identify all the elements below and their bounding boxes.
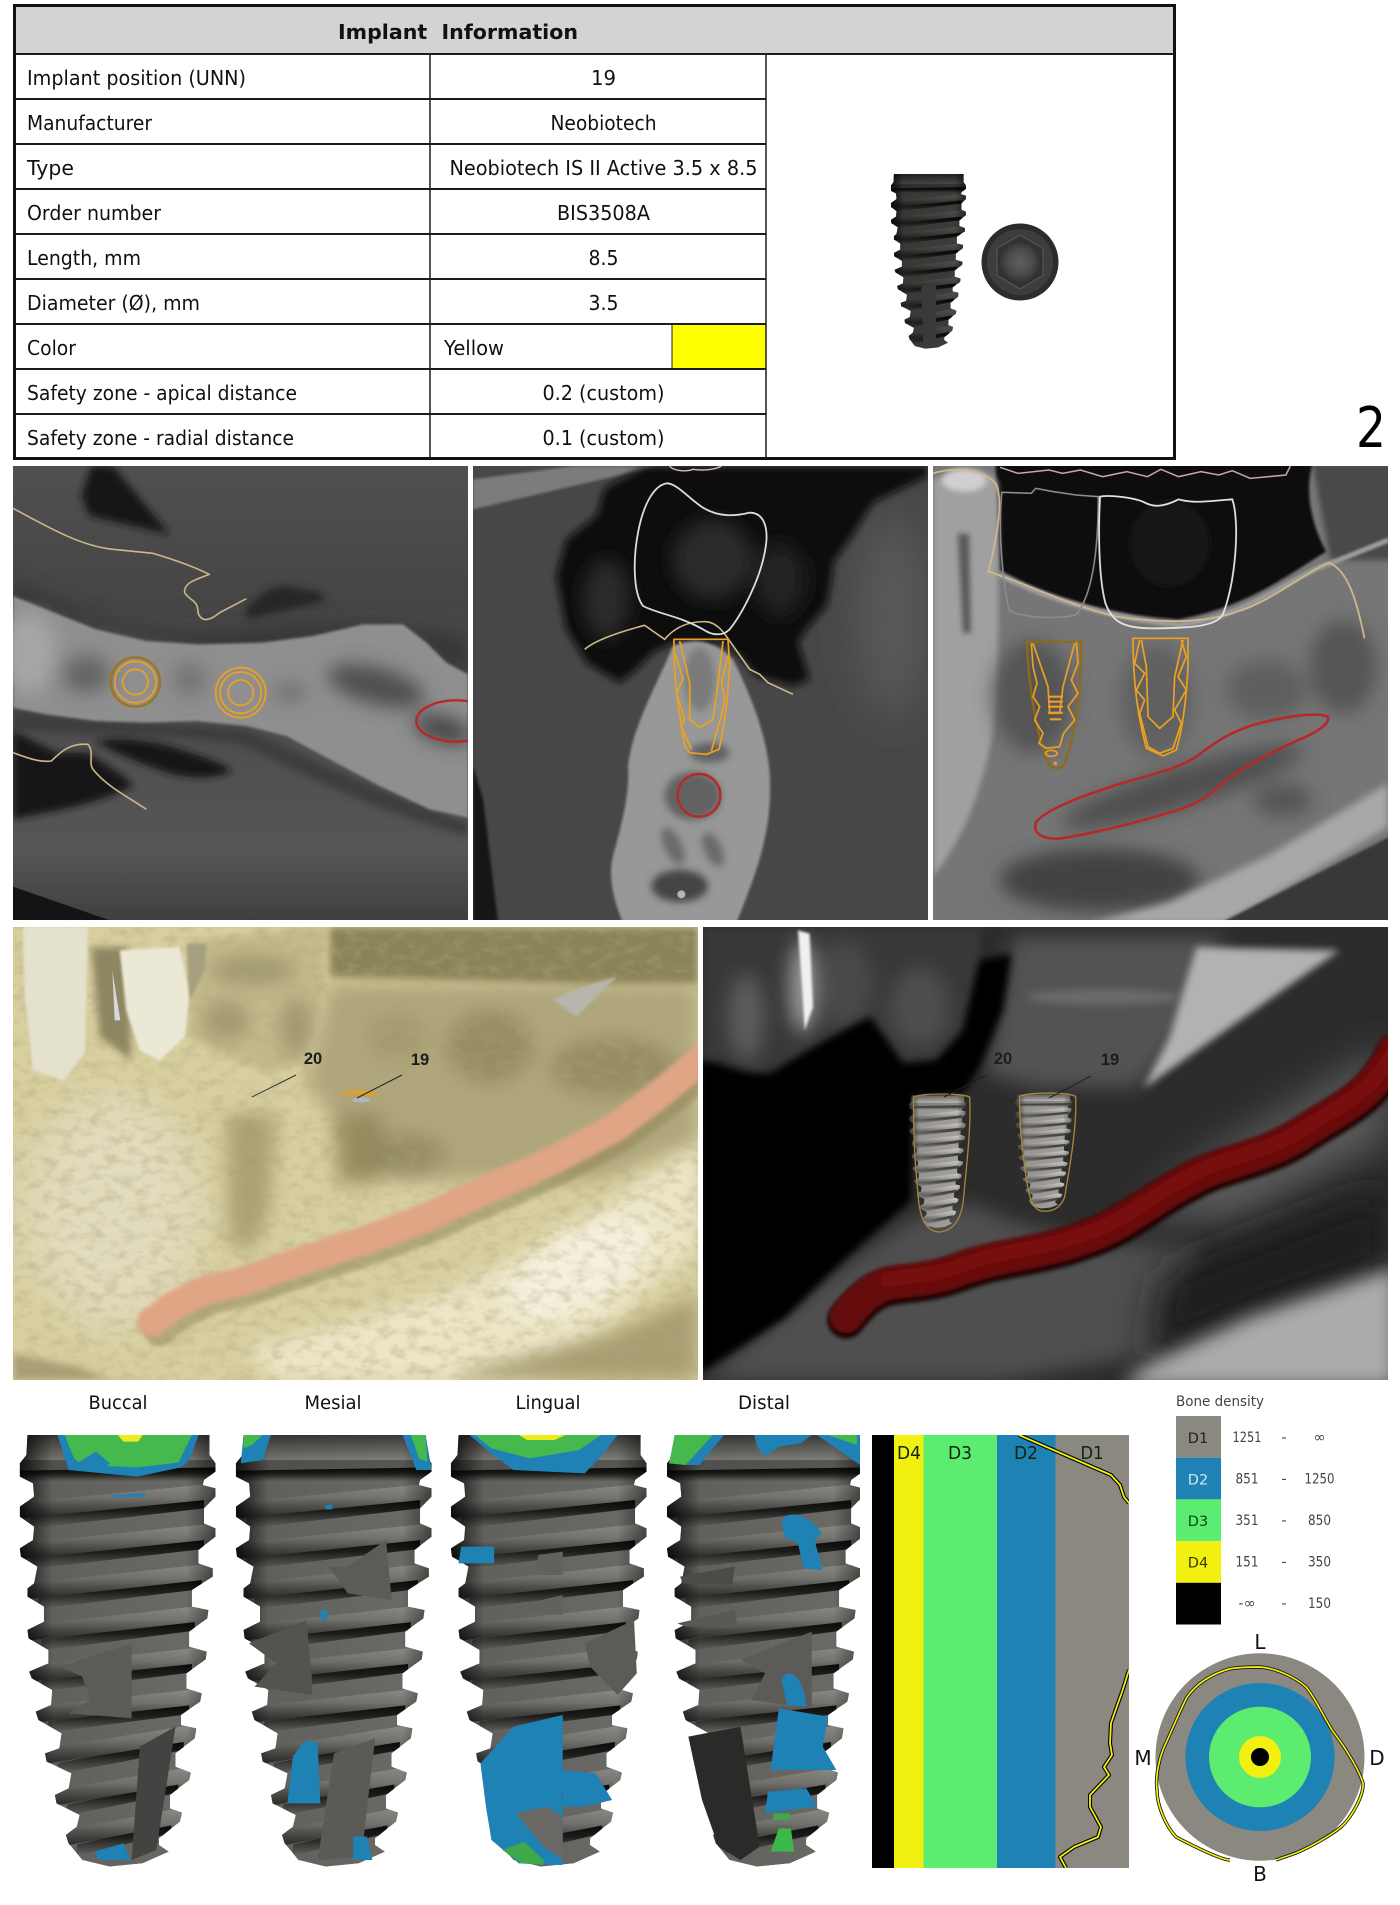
legend row D4: 350 bbox=[1308, 1554, 1331, 1570]
legend row D1: ∞ bbox=[1313, 1430, 1326, 1446]
left dark edge bbox=[473, 766, 498, 923]
implant 19 leader and number: 19 bbox=[1101, 1051, 1119, 1069]
bone base colour bbox=[13, 927, 698, 1380]
implant outline bbox=[674, 639, 730, 754]
view label: Mesial: Mesial bbox=[304, 1392, 362, 1414]
table header band bbox=[14, 6, 1174, 54]
mottled bone texture bbox=[13, 927, 698, 1380]
bone contour bbox=[1157, 1667, 1363, 1860]
nerve canal shadow bbox=[159, 1066, 712, 1331]
implant 19 leader and number bbox=[1049, 1051, 1119, 1098]
implant 20 outline bbox=[914, 1094, 970, 1232]
bone contour upper bbox=[1019, 1435, 1129, 1503]
yellow colour swatch bbox=[672, 325, 766, 369]
tooth root shading bbox=[728, 940, 950, 1060]
strip: D2 bbox=[997, 1435, 1056, 1868]
legend row D1: D1 bbox=[1188, 1431, 1208, 1447]
table row labels: Order number bbox=[27, 201, 162, 225]
implant 20 rings bbox=[111, 657, 160, 707]
table row labels: Color bbox=[27, 336, 77, 360]
table row values: 3.5 bbox=[588, 291, 618, 315]
implant 19 rings bbox=[216, 668, 266, 718]
table row labels: Type bbox=[26, 156, 74, 180]
marrow cavity bbox=[651, 648, 730, 902]
pink top outline bbox=[1000, 466, 1290, 478]
legend: bone density bbox=[1176, 1394, 1334, 1624]
implant 19 leader and number bbox=[357, 1051, 429, 1098]
gum outline upper bbox=[13, 508, 246, 620]
table row values: BIS3508A bbox=[557, 201, 650, 225]
grey crown outline bbox=[1000, 488, 1098, 617]
black corner bbox=[13, 887, 126, 926]
dark air space bbox=[996, 463, 1326, 619]
root of tooth left bbox=[23, 927, 88, 1080]
legend row D3 bbox=[1176, 1499, 1331, 1541]
panel: axial CT slice bbox=[13, 466, 468, 920]
mandible bone cross-section bbox=[611, 641, 770, 923]
tooth roots grey bbox=[703, 927, 980, 1074]
legend row below D4: - bbox=[1281, 1596, 1287, 1612]
legend row D1: - bbox=[1281, 1430, 1287, 1446]
legend row D3: - bbox=[1281, 1513, 1287, 1529]
chart: radial density map bbox=[1134, 1630, 1385, 1886]
root of tooth centre bbox=[120, 947, 190, 1060]
black region bbox=[700, 954, 1011, 1374]
panel: implant information table bbox=[13, 4, 1386, 461]
upper right tissue bbox=[1313, 463, 1393, 560]
strip labels: D1 bbox=[1080, 1443, 1104, 1464]
implant 19 leader and number: 19 bbox=[411, 1051, 429, 1069]
cortical band below air space bbox=[1000, 540, 1389, 625]
table row values: 19 bbox=[591, 66, 616, 90]
concentric density rings bbox=[1156, 1653, 1364, 1861]
legend row D2: 1250 bbox=[1304, 1472, 1334, 1488]
nerve cross-section bbox=[416, 700, 496, 742]
faint tissue bbox=[1130, 500, 1210, 587]
panel: density profile strips bbox=[872, 1435, 1129, 1868]
table row labels: Implant position (UNN) bbox=[27, 66, 246, 90]
direction label B: B bbox=[1253, 1862, 1267, 1886]
dark air space bbox=[556, 466, 928, 686]
bright mandible bone band bbox=[13, 596, 468, 818]
implant 19 exposed spot bbox=[352, 1098, 370, 1102]
olive shadow bottom right bbox=[460, 1294, 698, 1380]
crown outline bbox=[635, 483, 767, 634]
implant 20 leader and number: 20 bbox=[304, 1050, 322, 1068]
top centre swirl bone bbox=[190, 927, 326, 1074]
dark tissue bottom right bbox=[1220, 835, 1393, 923]
legend title: Bone density bbox=[1176, 1394, 1264, 1410]
soft tissue background bbox=[13, 466, 468, 920]
view label: Lingual: Lingual bbox=[516, 1392, 580, 1414]
legend row D2: D2 bbox=[1188, 1472, 1208, 1488]
nerve canal bbox=[846, 1045, 1397, 1320]
dark gap between roots bbox=[91, 947, 131, 1060]
dark shadow above bone bbox=[13, 579, 468, 679]
shaded tooth side bbox=[186, 944, 206, 1000]
bone background bbox=[933, 466, 1388, 920]
implant 20 leader and number bbox=[944, 1050, 1012, 1097]
grey exposed patch bbox=[553, 977, 616, 1017]
strip labels: D4 bbox=[897, 1443, 921, 1464]
nerve canal bbox=[152, 1057, 705, 1322]
strip labels: D3 bbox=[948, 1443, 972, 1464]
direction label L: L bbox=[1254, 1630, 1266, 1654]
bright diagonal streak bbox=[1143, 947, 1340, 1089]
legend row D4: 151 bbox=[1236, 1554, 1258, 1570]
table row values bbox=[443, 66, 758, 450]
root streak halo bbox=[790, 940, 816, 1034]
table row labels: Diameter (Ø), mm bbox=[27, 291, 200, 315]
direction label D: D bbox=[1369, 1746, 1385, 1770]
background tissue bbox=[473, 466, 928, 920]
adjacent tooth root bbox=[933, 468, 998, 877]
pink top outline bbox=[670, 466, 721, 471]
view label: Distal: Distal bbox=[738, 1392, 790, 1414]
implant: buccal view bbox=[16, 1435, 219, 1867]
slit between roots bbox=[112, 970, 120, 1020]
lower cortical bone bbox=[1090, 783, 1388, 923]
icon: implant top view bbox=[982, 224, 1058, 300]
implant: lingual view bbox=[448, 1435, 650, 1867]
light trabecular band bbox=[1026, 989, 1180, 1005]
dark band lower right bbox=[1146, 1187, 1388, 1360]
implant 20 leader and number: 20 bbox=[994, 1050, 1012, 1068]
legend row D4: D4 bbox=[1188, 1556, 1208, 1572]
implant 19 top bbox=[338, 1090, 381, 1097]
panel: X-ray view with implants and nerve bbox=[703, 637, 1388, 1380]
upper right grey bone bbox=[986, 937, 1223, 1087]
implant 20 outline bbox=[1027, 642, 1081, 768]
table row labels: Manufacturer bbox=[27, 111, 153, 135]
right upper olive bone bbox=[306, 984, 698, 1180]
bone contour lower bbox=[1060, 1670, 1129, 1868]
faint tissue inside air space bbox=[583, 519, 806, 639]
implant: mesial view bbox=[233, 1435, 435, 1867]
dark air pockets bbox=[13, 466, 325, 819]
bright top-left stripe bbox=[473, 466, 660, 509]
strip: D3 bbox=[924, 1435, 997, 1868]
strip labels: D2 bbox=[1014, 1443, 1038, 1464]
panel: panoramic CT slice bbox=[884, 466, 1388, 1294]
view label: Buccal: Buccal bbox=[88, 1392, 148, 1414]
legend row D1: 1251 bbox=[1232, 1430, 1262, 1446]
brightest lower bone patch bbox=[492, 1195, 667, 1339]
trabecular bone detail bbox=[63, 655, 475, 750]
bright bone lower right bbox=[1123, 1267, 1396, 1387]
legend row D3: D3 bbox=[1188, 1514, 1208, 1530]
swirl shading bbox=[203, 955, 313, 1057]
table row values: 8.5 bbox=[588, 246, 618, 270]
strip: D4 bbox=[894, 1435, 924, 1868]
table row labels: Safety zone - radial distance bbox=[27, 426, 294, 450]
ghost implant 20 bbox=[226, 1114, 276, 1247]
marrow bright spot bbox=[677, 890, 685, 898]
dark top stripes bbox=[330, 927, 698, 984]
strip: D1 bbox=[1056, 1435, 1129, 1868]
panel: cross-sectional CT slice bbox=[473, 466, 928, 920]
legend row below D4 bbox=[1176, 1583, 1331, 1624]
gum outline lower bbox=[13, 744, 146, 809]
olive mottling bbox=[353, 1010, 676, 1174]
strip labels bbox=[897, 1443, 1104, 1464]
implant 19 outline bbox=[1020, 1093, 1076, 1211]
direction label M: M bbox=[1134, 1746, 1152, 1770]
table row values: Yellow bbox=[443, 336, 504, 360]
implant 19 screw bbox=[1015, 1095, 1073, 1208]
dark shadow below bone bbox=[13, 709, 468, 836]
legend row below D4: -∞ bbox=[1238, 1596, 1256, 1612]
olive shadow bottom left bbox=[13, 1354, 113, 1380]
legend row D2 bbox=[1176, 1458, 1334, 1499]
legend row below D4: 150 bbox=[1308, 1596, 1331, 1612]
implant 19 outline bbox=[1133, 638, 1188, 756]
legend row D4: - bbox=[1281, 1554, 1287, 1570]
nerve cross-section bbox=[678, 774, 720, 817]
base tone bbox=[703, 927, 1388, 1380]
page number: 2 bbox=[1356, 396, 1386, 461]
bright left bone bbox=[3, 613, 56, 693]
panel: 3D bone rendering bbox=[13, 927, 698, 1380]
implant 20 screw bbox=[909, 1095, 967, 1228]
grey right band bbox=[1136, 1047, 1388, 1220]
table row values: 0.2 (custom) bbox=[542, 381, 664, 405]
table row labels: Length, mm bbox=[27, 246, 141, 270]
gum outline bbox=[933, 470, 1364, 638]
legend row D3: 351 bbox=[1236, 1513, 1258, 1529]
legend row D2: - bbox=[1281, 1472, 1287, 1488]
table row labels: Safety zone - apical distance bbox=[27, 381, 297, 405]
implant 20 leader and number bbox=[252, 1050, 322, 1097]
table row values: Neobiotech IS II Active 3.5 x 8.5 bbox=[450, 156, 758, 180]
lower bone glow bbox=[703, 1204, 1203, 1380]
trabecular patches bbox=[993, 620, 1376, 912]
lighter left bone bbox=[26, 1097, 200, 1324]
bright lower bone bbox=[246, 1140, 698, 1380]
white crown outline bbox=[1099, 496, 1236, 628]
implant: distal view bbox=[664, 1435, 867, 1867]
table row values: 0.1 (custom) bbox=[542, 426, 664, 450]
legend row D4 bbox=[1176, 1541, 1331, 1583]
legend row D2: 851 bbox=[1236, 1472, 1258, 1488]
table row values: Neobiotech bbox=[550, 111, 656, 135]
panel: implant density views bbox=[20, 1392, 860, 1866]
ghost implant 19 bbox=[333, 1114, 383, 1184]
legend row D1 bbox=[1176, 1416, 1326, 1458]
strip: below D4 bbox=[872, 1435, 894, 1868]
bright root streak bbox=[798, 930, 813, 1030]
gum outline bbox=[585, 622, 793, 694]
legend row D3: 850 bbox=[1308, 1513, 1331, 1529]
table heading: Implant Information bbox=[338, 20, 578, 44]
icon: implant screw bbox=[890, 174, 967, 349]
right tissue lighter bbox=[856, 516, 930, 716]
nerve canal outline bbox=[1035, 715, 1328, 839]
table row labels bbox=[26, 66, 297, 450]
